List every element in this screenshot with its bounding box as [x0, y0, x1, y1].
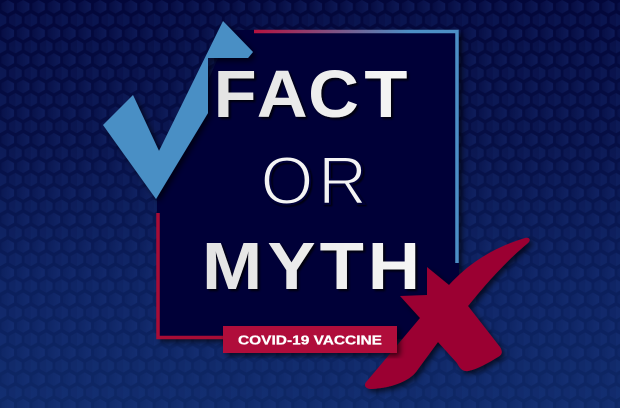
central navy panel: [157, 30, 459, 339]
heading: OR: OR: [260, 143, 367, 219]
frame: gradient top and blue right edge: [254, 32, 457, 263]
frame: red left and bottom edge: [158, 213, 240, 338]
heading: MYTH: MYTH: [202, 228, 420, 303]
heading: FACT: FACT: [214, 57, 407, 132]
label: COVID-19 Vaccine: [223, 326, 397, 353]
icon: red X mark: [365, 238, 530, 389]
label: COVID-19 Vaccine: COVID-19 VACCINE: [238, 332, 382, 348]
icon: blue check mark: [103, 21, 253, 199]
